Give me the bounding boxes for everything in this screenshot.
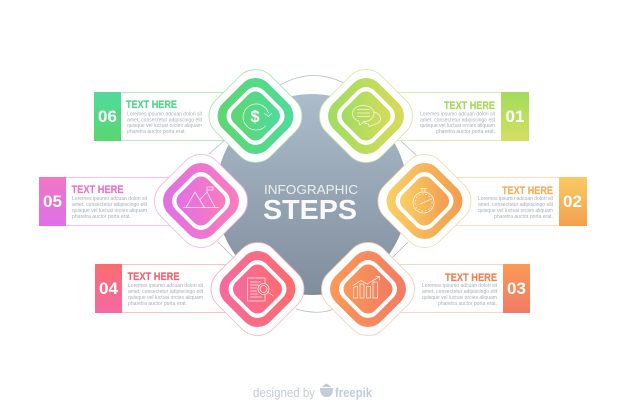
icon: stopwatch <box>413 188 434 213</box>
panel: step 03 label: quisque vel luctusi orcies aliquam <box>422 295 497 301</box>
tab 03 <box>503 264 530 313</box>
panel: step 01 label: Loremes ipsumo adcuan dolori sit <box>420 112 496 118</box>
panel: step 04 label: TEXT HERE <box>128 271 180 283</box>
panel: step 03 label: Loremes ipsumo adcuan dolori sit <box>422 283 498 289</box>
panel: step 05 label: pharetra auctor porta erat. <box>72 214 131 220</box>
panel: step 05 label: quisque vel luctusi orcies aliquam <box>72 208 147 214</box>
panel: step 06 label <box>94 92 224 141</box>
title <box>263 182 358 225</box>
tab 04 <box>95 264 122 313</box>
panel: step 05 label <box>39 177 170 226</box>
panel: step 04 label: pharetra auctor porta erat. <box>128 301 187 307</box>
panel: step 01 label: TEXT HERE <box>444 100 495 112</box>
panel: step 02 label: amet, consectetur adipiscingo elit <box>478 202 554 208</box>
panel: step 03 label: pharetra auctor porta erat. <box>438 301 497 307</box>
panel: step 05 label: amet, consectetur adipiscingo elit <box>72 202 148 208</box>
diamond 03 with bar chart icon <box>312 233 424 345</box>
panel: step 06 label: pharetra auctor porta erat. <box>127 129 186 135</box>
tab 06 <box>94 92 121 141</box>
panel: step 02 label: 02 <box>563 192 582 211</box>
icon: freepik mascot <box>320 384 333 397</box>
diamond 02 with stopwatch icon <box>369 145 480 257</box>
icon: speech bubbles <box>352 106 380 126</box>
panel: step 01 label: pharetra auctor porta erat. <box>436 129 495 135</box>
freepik credit <box>253 384 372 400</box>
title: INFOGRAPHIC <box>264 182 358 197</box>
panel: step 06 label: quisque vel luctusi orcies aliquam <box>127 123 202 129</box>
diamond 04 with document search icon <box>202 233 313 345</box>
panel: step 01 label: amet, consectetur adipiscingo elit <box>420 118 496 124</box>
panel: step 02 label: Loremes ipsumo adcuan dolori sit <box>478 196 554 202</box>
diamond 06 with dollar icon <box>200 60 311 172</box>
icon: dollar with circular arrow: $ <box>250 108 260 126</box>
icon: mountains and flag <box>183 187 219 208</box>
panel: step 06 label: amet, consectetur adipiscingo elit <box>127 118 203 124</box>
panel: step 04 label: amet, consectetur adipiscingo elit <box>128 289 204 295</box>
panel: step 05 label: 05 <box>43 192 62 211</box>
tab 02 <box>559 177 587 226</box>
panel: step 06 label: TEXT HERE <box>126 99 177 111</box>
panel: step 04 label: 04 <box>99 279 118 298</box>
tab 01 <box>501 92 529 141</box>
central grey circle <box>216 94 408 295</box>
panel: step 02 label <box>456 177 587 226</box>
panel: step 05 label: TEXT HERE <box>72 184 124 196</box>
panel: step 02 label: TEXT HERE <box>502 185 553 197</box>
panel: step 06 label: 06 <box>98 107 117 126</box>
panel: step 04 label <box>95 264 226 313</box>
panel: step 01 label: quisque vel luctusi orcies aliquam <box>420 123 495 129</box>
diamond 05 with mountain flag icon <box>145 145 257 257</box>
panel: step 01 label: 01 <box>506 107 524 126</box>
panel: step 04 label: Loremes ipsumo adcuan dolori sit <box>128 283 204 289</box>
icon: rising bars with arrow <box>353 276 380 298</box>
panel: step 03 label: TEXT HERE <box>445 272 497 284</box>
panel: step 02 label: pharetra auctor porta erat. <box>494 214 553 220</box>
freepik credit: designed by <box>253 386 316 400</box>
panel: step 03 label: amet, consectetur adipiscingo elit <box>422 289 498 295</box>
panel: step 06 label: Loremes ipsumo adcuan dolori sit <box>127 112 203 118</box>
tab 05 <box>39 177 66 226</box>
panel: step 03 label <box>398 264 530 313</box>
panel: step 04 label: quisque vel luctusi orcies aliquam <box>128 295 203 301</box>
panel: step 05 label: Loremes ipsumo adcuan dolori sit <box>72 196 148 202</box>
icon: document and magnifier <box>248 278 274 301</box>
panel: step 01 label <box>396 92 529 141</box>
diamond 01 with chat icon <box>310 60 422 172</box>
freepik credit: freepik <box>335 386 372 400</box>
thin connector ring behind the circle <box>209 75 417 312</box>
title: STEPS <box>263 194 357 225</box>
panel: step 03 label: 03 <box>507 279 526 298</box>
panel: step 02 label: quisque vel luctusi orcies aliquam <box>478 208 553 214</box>
